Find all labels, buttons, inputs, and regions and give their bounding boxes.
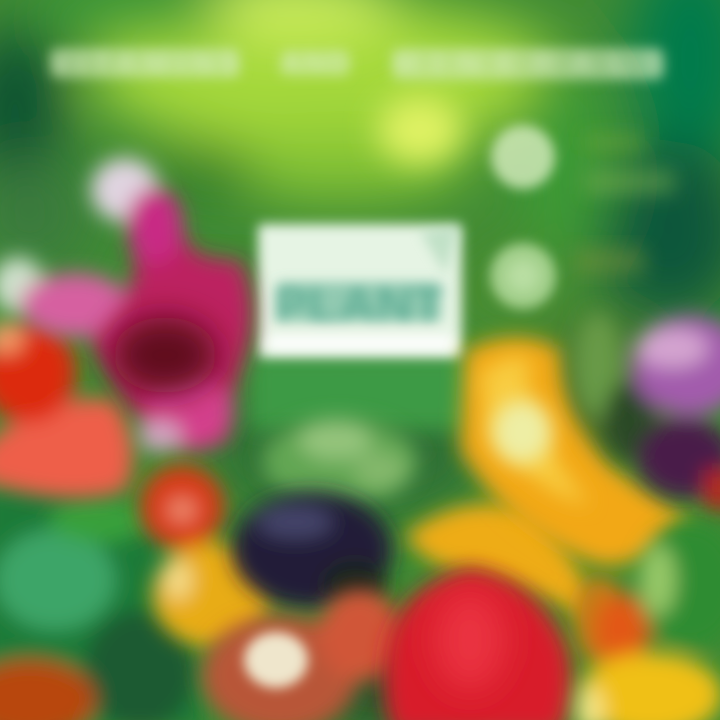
fruit: orange, lime and yellow pepper at right xyxy=(574,521,720,720)
vegetable: green broccoli xyxy=(262,418,418,506)
central white label panel xyxy=(250,224,472,430)
fruit: dark plum xyxy=(232,492,392,609)
icon: lower circle with label xyxy=(490,243,645,309)
icon: upper circle with label xyxy=(491,125,675,194)
fruit: yellow bananas xyxy=(405,338,690,625)
title: MINERALS xyxy=(392,47,664,80)
title xyxy=(50,47,664,80)
title: VITAMINS xyxy=(50,47,240,80)
fruit: tomato and melon on the left xyxy=(0,322,133,498)
title: AND xyxy=(280,47,350,80)
fruit: red apple xyxy=(384,568,571,720)
fruit: onion and peach at bottom xyxy=(202,589,402,720)
fruit: small tomato and yellow plum xyxy=(140,465,272,647)
fruit: purple cabbage and eggplant xyxy=(574,313,720,510)
central white label panel: PLANT xyxy=(274,277,444,333)
flower: magenta orchid xyxy=(0,158,252,452)
leafy greens: lower left xyxy=(0,483,205,720)
